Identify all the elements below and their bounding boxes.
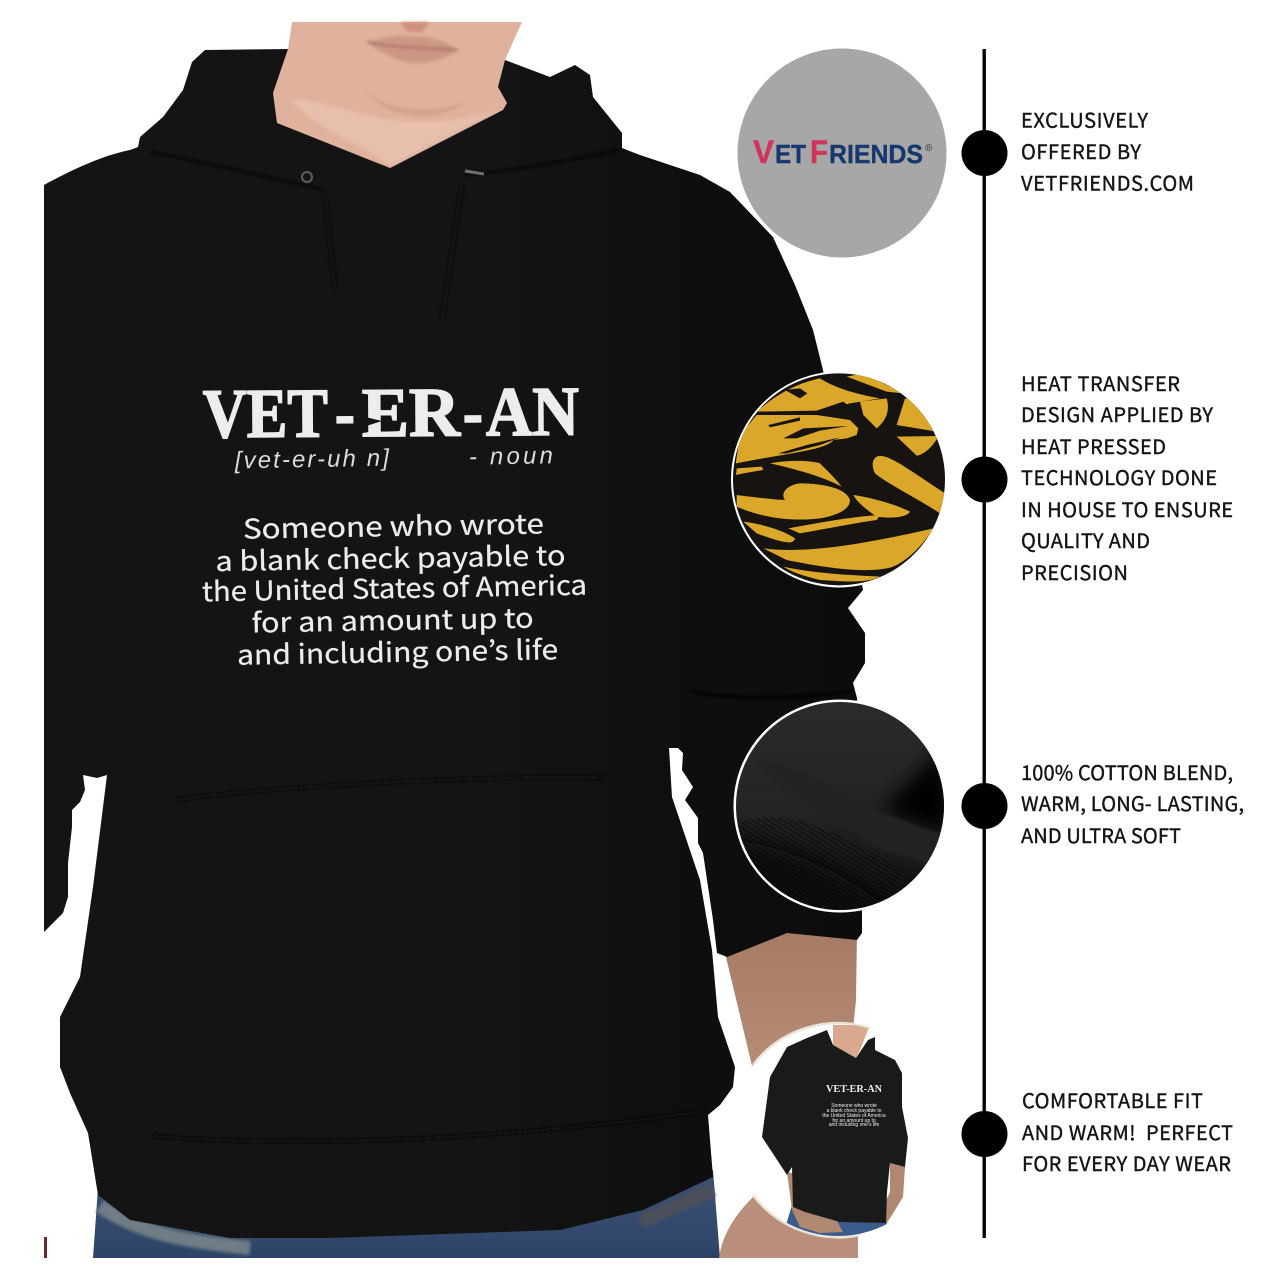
feature: comfortable fit bbox=[962, 1085, 1233, 1177]
definition text: the United States of America bbox=[202, 564, 587, 609]
feature: heat transfer: IN HOUSE TO ENSURE bbox=[1021, 494, 1233, 523]
feature: exclusively offered: VETFRIENDS.COM bbox=[1021, 168, 1194, 196]
mini arms bbox=[787, 1172, 843, 1233]
hoodie graphic: veteran definition bbox=[201, 374, 588, 673]
feature: cotton blend: AND ULTRA SOFT bbox=[1021, 820, 1181, 849]
mini print: for an amount up to bbox=[832, 1118, 876, 1124]
left hand slivers bbox=[44, 916, 50, 1258]
feature: heat transfer: PRECISION bbox=[1021, 557, 1128, 586]
logo text: V bbox=[753, 134, 775, 170]
forearm bbox=[725, 925, 857, 1070]
definition text: for an amount up to bbox=[251, 597, 534, 641]
feature: heat transfer: TECHNOLOGY DONE bbox=[1021, 462, 1217, 491]
feature: heat transfer bbox=[962, 368, 1233, 586]
feature: heat transfer: DESIGN APPLIED BY bbox=[1021, 399, 1213, 428]
definition text: and including one’s life bbox=[237, 628, 558, 673]
headline: ER bbox=[362, 375, 462, 452]
mini print bbox=[822, 1083, 886, 1128]
logo text: ® bbox=[925, 143, 933, 154]
logo text: ET bbox=[775, 139, 806, 169]
circle: heat transfer close-up bbox=[731, 372, 947, 588]
circle: vetfriends logo bbox=[738, 48, 946, 258]
circle: model full view bbox=[752, 1022, 908, 1239]
headline: - bbox=[335, 375, 355, 452]
feature: heat transfer: QUALITY AND bbox=[1021, 525, 1150, 554]
feature: comfortable fit: FOR EVERY DAY WEAR bbox=[1022, 1148, 1231, 1177]
mini print: the United States of America bbox=[822, 1113, 886, 1119]
feature: comfortable fit: AND WARM! PERFECT bbox=[1022, 1117, 1233, 1146]
feature: exclusively offered: OFFERED BY bbox=[1021, 136, 1141, 165]
logo text bbox=[753, 134, 933, 170]
circle: fabric close-up bbox=[730, 695, 950, 920]
product photo: model wearing hoodie bbox=[44, 22, 865, 1258]
mini hoodie bbox=[762, 1030, 908, 1223]
drawstring eyelets bbox=[302, 171, 484, 182]
feature: heat transfer: HEAT PRESSED bbox=[1021, 431, 1166, 460]
logo text: RIENDS bbox=[829, 139, 923, 169]
mini print: VET-ER-AN bbox=[826, 1083, 882, 1095]
headline: - bbox=[463, 374, 483, 451]
mini face bbox=[833, 1025, 870, 1058]
headline: AN bbox=[486, 374, 579, 451]
timeline line bbox=[982, 49, 986, 1238]
face and neck bbox=[273, 22, 522, 168]
pronunciation: [vet-er-uh n] bbox=[234, 445, 390, 474]
feature: exclusively offered: EXCLUSIVELY bbox=[1021, 104, 1148, 134]
mini jeans bbox=[786, 1206, 887, 1236]
lower hand bbox=[719, 1190, 858, 1258]
feature: cotton blend bbox=[962, 757, 1244, 849]
definition text: Someone who wrote bbox=[243, 502, 544, 547]
headline bbox=[203, 374, 579, 453]
definition text: a blank check payable to bbox=[215, 534, 566, 579]
feature: cotton blend: WARM, LONG- LASTING, bbox=[1021, 788, 1244, 817]
circle rim over arm bbox=[753, 1023, 870, 1237]
mini print: a blank check payable to bbox=[826, 1108, 882, 1114]
definition text bbox=[201, 502, 588, 673]
hoodie silhouette bbox=[44, 49, 865, 1238]
feature: comfortable fit: COMFORTABLE FIT bbox=[1022, 1085, 1203, 1114]
jeans bbox=[93, 1170, 720, 1258]
mini print: and including one’s life bbox=[829, 1122, 879, 1128]
feature: heat transfer: HEAT TRANSFER bbox=[1021, 368, 1180, 397]
logo text: F bbox=[810, 134, 828, 170]
feature: cotton blend: 100% COTTON BLEND, bbox=[1021, 757, 1233, 786]
headline: VET bbox=[203, 375, 328, 453]
part of speech: - noun bbox=[469, 442, 553, 471]
feature: exclusively offered bbox=[962, 104, 1194, 196]
lips bbox=[367, 36, 458, 63]
mini print: Someone who wrote bbox=[831, 1103, 877, 1109]
hood seam and pocket lines bbox=[150, 150, 853, 1141]
